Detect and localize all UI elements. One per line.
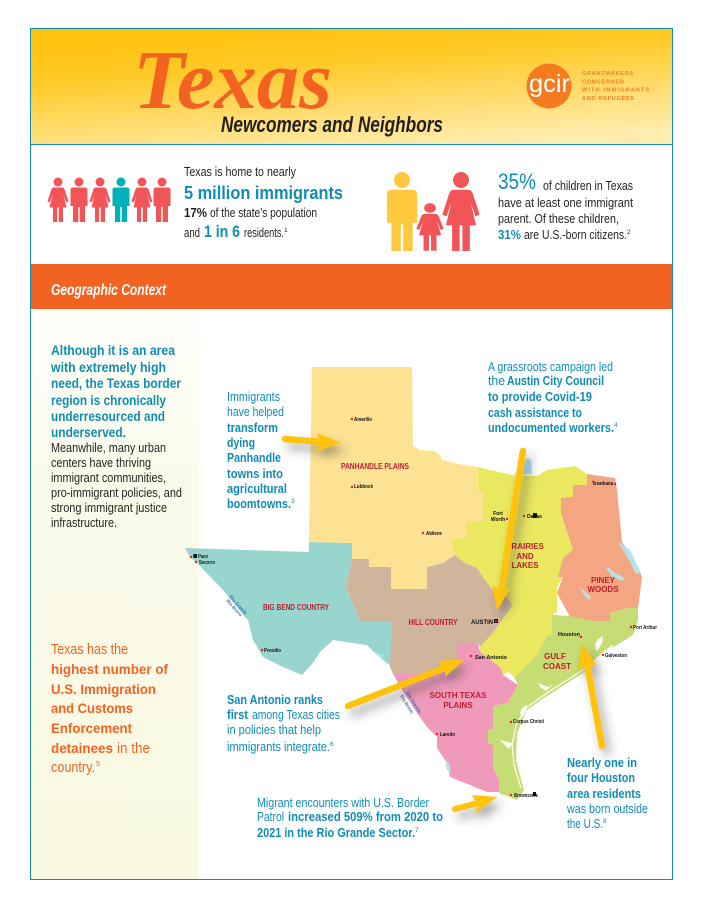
left side panel xyxy=(31,309,199,879)
callout: Austin City Council: Austin City Council xyxy=(507,374,604,388)
region: Gulf Coast xyxy=(488,608,638,800)
callout: Houston: 8 xyxy=(603,818,607,825)
stat: 5 million immigrants: and xyxy=(184,225,200,240)
text block: border region need: immigrant communities, xyxy=(51,470,166,485)
text block: border region need xyxy=(50,343,182,530)
text block: ICE detainees: country. xyxy=(51,760,95,776)
city markers and names: El Paso xyxy=(193,554,208,560)
callout: Houston: area residents xyxy=(567,787,641,801)
text block: ICE detainees xyxy=(51,642,168,776)
title: Texas: Texas xyxy=(133,34,332,127)
text block: border region need: Although it is an area xyxy=(51,343,175,358)
callout: Houston: four Houston xyxy=(567,771,635,785)
logo: gcir xyxy=(526,64,649,108)
subtitle: Newcomers and Neighbors xyxy=(221,112,443,137)
city markers and names: San Antonio xyxy=(475,655,507,661)
callout: Rio Grande Sector: Migrant encounters with U.S. Border xyxy=(257,795,430,810)
text block: border region need: need, the Texas border xyxy=(51,376,182,391)
region labels: PINEY xyxy=(591,576,616,585)
stat: 35% of children: parent. Of these children, xyxy=(498,211,619,226)
callout: Panhandle boomtowns: transform xyxy=(227,421,278,435)
callout: San Antonio: immigrants integrate. xyxy=(227,739,330,754)
city markers and names xyxy=(190,417,657,799)
text block: ICE detainees: detainees xyxy=(51,740,113,756)
region labels: AND xyxy=(516,552,534,561)
text block: ICE detainees: Texas has the xyxy=(51,642,128,658)
section bar: Geographic Context xyxy=(31,264,672,309)
header banner xyxy=(31,29,672,144)
stat: 35% of children: 2 xyxy=(627,229,631,236)
text block: ICE detainees: U.S. Immigration xyxy=(51,681,156,697)
callout: Austin City Council: undocumented workers. xyxy=(488,421,614,435)
text block: ICE detainees: 5 xyxy=(96,759,100,768)
region labels: COAST xyxy=(543,662,571,671)
callout: Houston: was born outside xyxy=(566,801,648,816)
logo: gcir: CONCERNED xyxy=(582,80,624,86)
callout: Rio Grande Sector: Patrol xyxy=(257,809,284,824)
logo: gcir: gcir xyxy=(529,70,570,98)
city markers and names: Corpus Christi xyxy=(513,719,545,725)
callout: San Antonio: 6 xyxy=(330,741,334,748)
callout: San Antonio: San Antonio ranks xyxy=(227,693,323,707)
city markers and names: AUSTIN xyxy=(471,619,493,626)
city markers and names: Abilene xyxy=(426,531,442,537)
stat: 35% of children: of children in Texas xyxy=(543,178,633,193)
callout: Panhandle boomtowns: have helped xyxy=(227,404,284,419)
logo: gcir: GRANTMAKERS xyxy=(582,71,633,77)
city markers and names: Dallas xyxy=(527,514,542,520)
region labels xyxy=(263,462,619,710)
arrow: to San Antonio xyxy=(348,659,465,706)
callout: San Antonio: among Texas cities xyxy=(252,707,340,722)
logo: gcir: WITH IMMIGRANTS xyxy=(582,88,649,94)
map of Texas regions xyxy=(185,367,657,800)
region: Panhandle Plains xyxy=(309,367,483,589)
stat: 35% of children: have at least one immigrant xyxy=(498,195,633,210)
text block: border region need: infrastructure. xyxy=(51,515,117,530)
text block: border region need: pro-immigrant policies, and xyxy=(51,485,182,500)
icon: family of three xyxy=(387,172,480,251)
callout: Panhandle boomtowns: agricultural xyxy=(227,482,287,496)
stat: 35% of children xyxy=(498,169,633,242)
callout: Panhandle boomtowns: boomtowns. xyxy=(227,497,291,511)
lakes xyxy=(375,458,641,773)
arrow: to Austin xyxy=(492,451,523,611)
arrow: to Panhandle xyxy=(285,433,341,451)
region: Hill Country xyxy=(346,555,513,674)
stat: 5 million immigrants: Texas is home to nearly xyxy=(184,164,296,179)
icon: row of six people, one in six highlighted xyxy=(48,178,170,222)
city markers and names: Socorro xyxy=(199,560,215,566)
stat: 5 million immigrants xyxy=(184,164,343,241)
callout: San Antonio: in policies that help xyxy=(227,722,321,737)
city markers and names: Presidio xyxy=(264,648,281,654)
callout: Austin City Council: to provide Covid-19 xyxy=(488,390,592,404)
region labels: HILL COUNTRY xyxy=(408,618,458,627)
text block: border region need: strong immigrant justice xyxy=(51,500,167,515)
rivers label: Rio Bravo xyxy=(399,694,415,715)
rivers label: Rio Bravo xyxy=(225,598,243,618)
text block: border region need: region is chronically xyxy=(51,393,166,408)
callout: Panhandle boomtowns: dying xyxy=(227,436,255,450)
stat: 5 million immigrants: residents. xyxy=(244,225,284,240)
city markers and names: Port Arthur xyxy=(633,625,657,631)
region: Piney Woods xyxy=(557,474,642,621)
callout: Panhandle boomtowns xyxy=(227,389,295,511)
text block: border region need: underresourced and xyxy=(51,409,165,424)
callout: Austin City Council: cash assistance to xyxy=(488,406,582,420)
arrow: to Houston xyxy=(578,643,602,746)
section bar: Geographic Context: Geographic Context xyxy=(51,282,167,299)
callout: Rio Grande Sector: increased 509% from 2020 to xyxy=(288,810,443,824)
region labels: SOUTH TEXAS xyxy=(430,691,487,700)
callout: Rio Grande Sector: 7 xyxy=(415,827,419,834)
region labels: PLAINS xyxy=(443,701,473,710)
stat: 35% of children: are U.S.-born citizens. xyxy=(524,227,627,242)
callout: Austin City Council: 4 xyxy=(614,422,618,429)
stat: 5 million immigrants: 17% xyxy=(184,206,207,220)
logo: gcir: AND REFUGEES xyxy=(582,96,634,102)
city markers and names: Worth xyxy=(491,517,505,523)
region: South Texas Plains xyxy=(393,643,518,792)
region labels: PANHANDLE PLAINS xyxy=(341,462,410,471)
city markers and names: Laredo xyxy=(440,732,455,738)
arrow: to Rio Grande Sector xyxy=(455,795,497,813)
text block: ICE detainees: and Customs xyxy=(51,700,133,716)
stat: 5 million immigrants: 1 xyxy=(284,227,288,234)
rivers label: Rio Grande xyxy=(405,691,423,715)
callout: Panhandle boomtowns: 3 xyxy=(291,498,295,505)
text block: border region need: Meanwhile, many urban xyxy=(51,440,166,455)
region: Big Bend Country xyxy=(185,542,392,675)
callout: Rio Grande Sector xyxy=(257,795,443,840)
text block: ICE detainees: in the xyxy=(117,741,150,757)
text block: border region need: underserved. xyxy=(51,425,126,440)
city markers and names: Fort xyxy=(493,511,503,517)
callout: Houston: the U.S. xyxy=(567,816,603,831)
text block: ICE detainees: Enforcement xyxy=(51,720,132,736)
stat: 35% of children: 31% xyxy=(498,228,521,242)
callout: Panhandle boomtowns: towns into xyxy=(227,467,283,481)
city markers and names: Lubbock xyxy=(354,484,373,490)
stat: 5 million immigrants: 1 in 6 xyxy=(204,222,240,241)
callout: Rio Grande Sector: 2021 in the Rio Grande Sector. xyxy=(257,826,415,840)
callout: San Antonio: first xyxy=(227,708,249,722)
callout: Austin City Council: A grassroots campaign led xyxy=(488,359,613,374)
region labels: BIG BEND COUNTRY xyxy=(263,603,330,612)
stat: 5 million immigrants: of the state’s population xyxy=(210,205,317,220)
city markers and names: Galveston xyxy=(605,653,627,659)
city markers and names: Houston xyxy=(558,632,580,638)
region labels: PRAIRIES xyxy=(506,542,545,551)
city markers and names: Texarkana xyxy=(592,481,613,487)
callout: San Antonio xyxy=(227,693,340,754)
region labels: GULF xyxy=(544,652,566,661)
region labels: LAKES xyxy=(511,561,539,570)
rivers label: Rio Grande xyxy=(228,594,249,616)
city markers and names: Brownsville xyxy=(514,793,538,799)
callout: Houston xyxy=(566,756,648,831)
callout: Houston: Nearly one in xyxy=(567,756,637,770)
text block: border region need: with extremely high xyxy=(50,360,166,375)
coastal bays xyxy=(500,636,613,788)
callout: Panhandle boomtowns: Panhandle xyxy=(227,451,281,465)
region labels: WOODS xyxy=(587,585,619,594)
text block: border region need: centers have thriving xyxy=(51,455,151,470)
callout: Austin City Council xyxy=(488,359,618,435)
stat: 35% of children: 35% xyxy=(498,169,536,194)
text block: ICE detainees: highest number of xyxy=(51,661,168,677)
callout: Panhandle boomtowns: Immigrants xyxy=(227,389,280,404)
rivers label xyxy=(225,594,423,715)
stat: 5 million immigrants: 5 million immigrants xyxy=(184,183,343,203)
callout: Austin City Council: the xyxy=(488,373,505,388)
city markers and names: Amarillo xyxy=(354,417,372,423)
region: Prairies and Lakes xyxy=(451,466,587,677)
